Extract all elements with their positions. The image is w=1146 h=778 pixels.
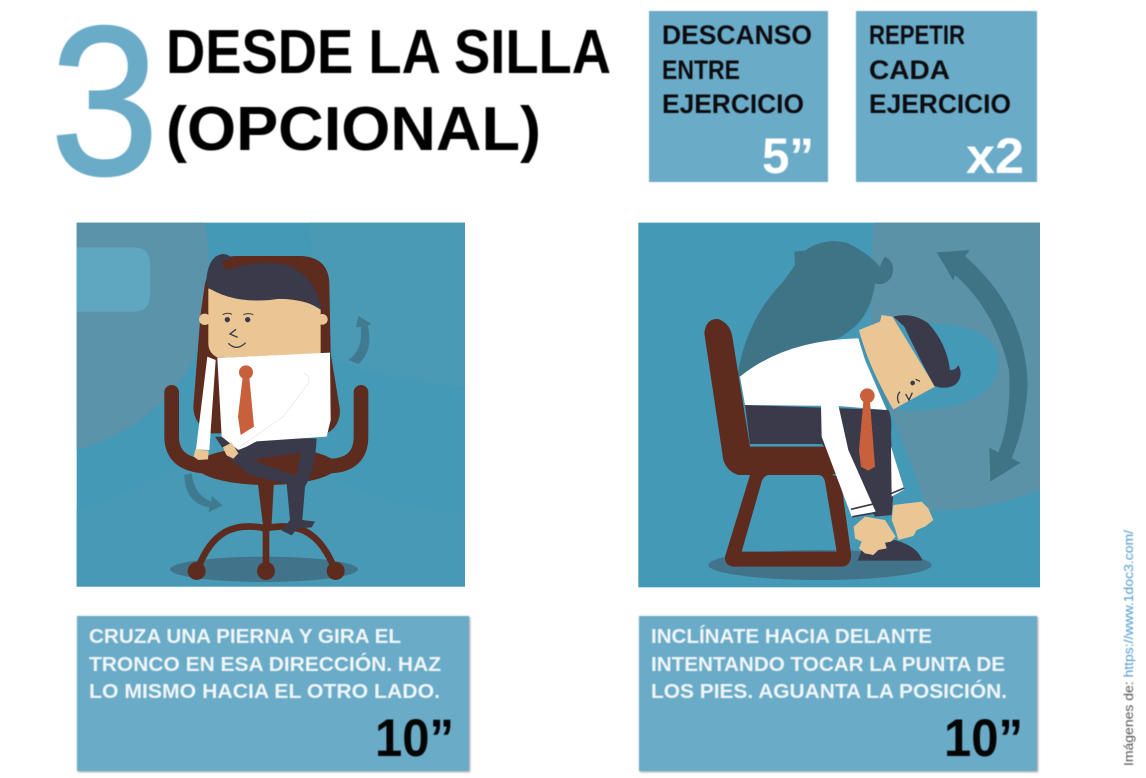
caption: twist instruction (77, 616, 469, 771)
floor shadow (708, 550, 932, 580)
caption: bend instruction: INCLÍNATE HACIA DELANTE (651, 625, 932, 648)
illustration: man bending forward on chair (638, 223, 1040, 587)
rotation arrow: upper right (348, 316, 372, 364)
shirt (217, 353, 331, 450)
title: DESDE LA SILLA (166, 18, 611, 87)
floor shadow (170, 557, 358, 582)
collar (861, 340, 889, 409)
caption: bend instruction: INTENTANDO TOCAR LA PUNTA DE (651, 654, 1005, 676)
grey background shape (868, 223, 1040, 510)
hands (194, 449, 209, 460)
panel: repeat each exercise (856, 11, 1037, 184)
hands (854, 517, 896, 555)
panel: repeat each exercise: CADA (869, 55, 950, 85)
panel: rest between exercises: DESCANSO (662, 20, 812, 50)
title (166, 18, 611, 164)
swivel base (197, 525, 335, 570)
illustration: man twisting on swivel chair (77, 223, 465, 587)
big bending arrow (937, 250, 1028, 482)
caption: twist instruction: TRONCO EN ESA DIRECCIÓN. HAZ (89, 652, 441, 676)
panel: rest between exercises: EJERCICIO (662, 89, 804, 119)
caption: bend instruction: 10” (944, 709, 1023, 768)
head (859, 315, 935, 409)
rotation arrow: lower left (184, 473, 223, 513)
caption: bend instruction: LOS PIES. AGUANTA LA POSICIÓN. (651, 679, 1007, 703)
chair seat and arms (172, 392, 361, 466)
image credit: Imágenes de: https://www.1doc3.com/ (1122, 529, 1136, 766)
caption: twist instruction: 10” (375, 709, 454, 768)
face (223, 313, 253, 347)
panel: rest between exercises (649, 11, 828, 184)
caption: twist instruction: CRUZA UNA PIERNA Y GIRA EL (89, 626, 401, 648)
head (208, 288, 321, 358)
chair backrest (193, 256, 340, 433)
panel: repeat each exercise: REPETIR (869, 20, 965, 50)
far sleeve (891, 447, 904, 497)
shadow silhouette of upright man (738, 241, 893, 377)
tie (239, 365, 253, 379)
trousers (745, 405, 893, 517)
shoe (858, 540, 922, 561)
panel: repeat each exercise: x2 (966, 128, 1024, 184)
tie (860, 388, 875, 403)
panel: rest between exercises: ENTRE (662, 55, 740, 85)
hair (893, 315, 961, 388)
caption: twist instruction: LO MISMO HACIA EL OTRO LADO. (89, 681, 440, 703)
title: (OPCIONAL) (166, 95, 541, 164)
hair (206, 254, 322, 311)
chair (704, 319, 858, 567)
panel: rest between exercises: 5” (762, 128, 814, 184)
grey background circle (77, 223, 209, 450)
near sleeve (821, 405, 876, 517)
face (898, 379, 920, 403)
shirt torso (740, 338, 887, 410)
caption: bend instruction (639, 616, 1037, 771)
panel: repeat each exercise: EJERCICIO (869, 89, 1011, 119)
trousers (215, 437, 317, 535)
